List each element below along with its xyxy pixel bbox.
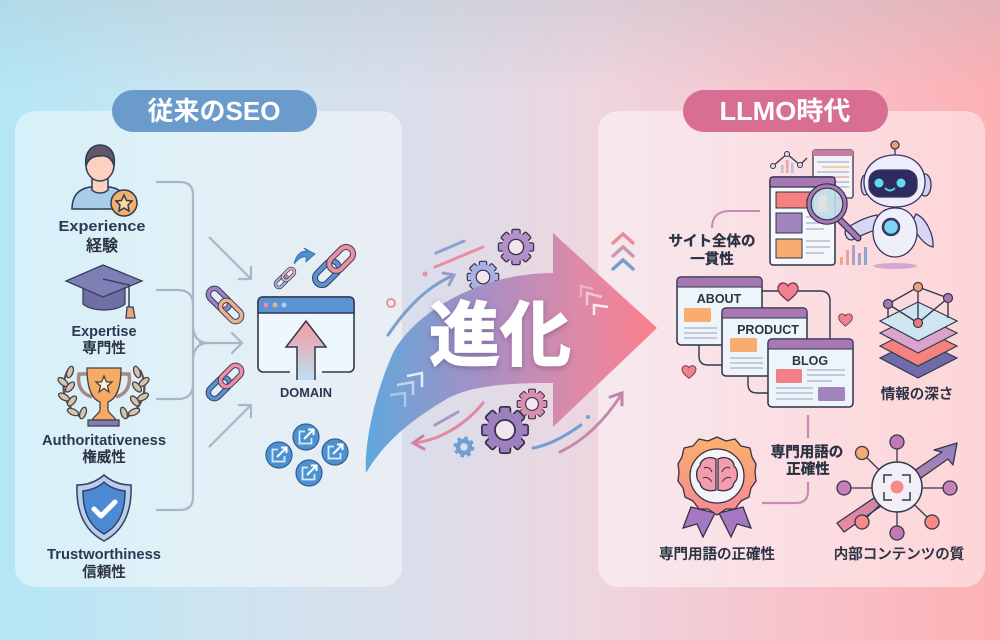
icon: heart large <box>778 283 798 301</box>
icon: gear blue behind arrow <box>467 261 499 293</box>
window: about: ABOUT <box>697 292 742 306</box>
icon: gear small right <box>517 389 547 419</box>
icon: expertise graduation cap <box>66 265 142 318</box>
icon: heart right <box>839 314 852 326</box>
icon: experience person <box>72 145 137 216</box>
label: authoritativeness <box>42 432 166 466</box>
window: product: PRODUCT <box>737 323 799 337</box>
arrow: diagonal down <box>209 237 251 279</box>
icon: brain badge <box>678 437 756 537</box>
label: expertise <box>72 323 136 357</box>
icon: domain browser window <box>258 297 354 380</box>
decorative motion lines lower <box>413 393 622 452</box>
icon: small curved arrow <box>294 248 315 264</box>
window: product <box>722 308 807 376</box>
icon: gear blue small <box>455 438 473 456</box>
label: expertise: Expertise <box>72 323 136 340</box>
chevrons outside arrow <box>613 234 633 269</box>
label: terminology accuracy callout: 専門用語の <box>771 443 843 461</box>
icon: chain link blue <box>206 363 244 401</box>
heading: LLMO era <box>683 90 888 132</box>
decorative motion lines upper <box>387 241 483 335</box>
icons: external link circles <box>266 424 348 486</box>
label: information depth: 情報の深さ <box>881 386 953 403</box>
chevrons inside arrow upper right <box>581 286 608 315</box>
title: evolution: 進化 <box>429 297 571 376</box>
icon: heart left <box>682 366 696 378</box>
window: about <box>677 277 762 345</box>
connector: terminology upper <box>807 415 809 438</box>
arrow: diagonal up <box>209 405 251 447</box>
heading: traditional SEO: 従来のSEO <box>148 96 280 126</box>
icon: chain link large <box>312 244 356 288</box>
window: blog <box>768 339 853 407</box>
panel: LLMO era <box>598 111 985 587</box>
icon: trust shield <box>77 475 131 541</box>
icon: chain link purple <box>206 286 244 324</box>
label: trustworthiness <box>47 546 161 581</box>
icon: gear big <box>482 407 528 453</box>
icon: gear upper <box>498 229 534 265</box>
connector: terminology lower <box>762 482 808 503</box>
icon: robot <box>845 141 933 269</box>
icon: chain link small <box>274 267 296 289</box>
label: terminology accuracy: 専門用語の正確性 <box>659 546 775 563</box>
icon: authority trophy <box>56 365 151 426</box>
panel: traditional SEO <box>15 111 402 587</box>
label: trustworthiness: Trustworthiness <box>47 546 161 563</box>
connector: site consistency <box>712 211 760 228</box>
window: blog: BLOG <box>792 354 828 368</box>
icon: mini line chart <box>770 152 807 173</box>
label: internal content quality: 内部コンテンツの質 <box>834 545 964 563</box>
chevrons inside arrow lower left <box>390 373 422 407</box>
bracket connecting E-E-A-T to domain <box>157 182 242 510</box>
label: terminology accuracy callout: 正確性 <box>786 461 830 478</box>
heading: traditional SEO <box>112 90 317 132</box>
connectors between pages <box>699 291 830 393</box>
icon: small bars <box>840 245 867 265</box>
label: authoritativeness: 権威性 <box>82 449 126 466</box>
label: site consistency: サイト全体の <box>668 232 756 250</box>
label: terminology accuracy callout <box>771 443 843 478</box>
label: site consistency <box>668 232 756 268</box>
label: site consistency: 一貫性 <box>690 251 734 268</box>
icon: internal content quality network <box>837 435 957 540</box>
label: experience: 経験 <box>86 237 118 255</box>
icon: information depth layers <box>880 282 957 378</box>
label: experience: Experience <box>58 218 146 235</box>
icon: magnifier <box>809 186 858 238</box>
label: trustworthiness: 信頼性 <box>82 564 126 581</box>
label: expertise: 専門性 <box>82 340 126 357</box>
icon: back document <box>813 150 853 198</box>
heading: LLMO era: LLMO時代 <box>720 96 850 126</box>
label: experience <box>58 218 146 255</box>
icon: analysed document <box>770 177 835 265</box>
label: domain: DOMAIN <box>280 386 332 400</box>
label: authoritativeness: Authoritativeness <box>42 432 166 449</box>
main evolution arrow <box>366 233 657 473</box>
